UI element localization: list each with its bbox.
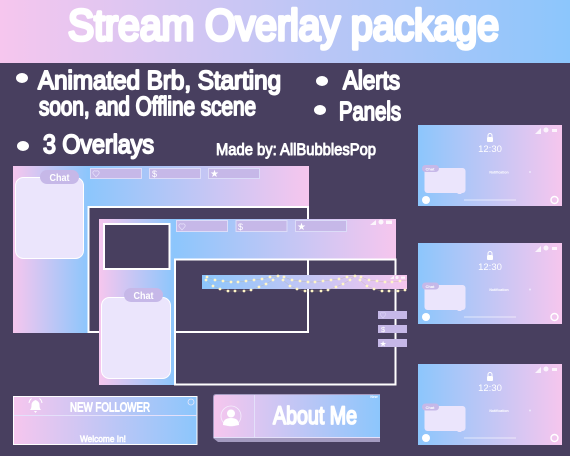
header banner — [0, 0, 570, 63]
overlay 1 — [13, 166, 309, 333]
frame — [88, 207, 308, 332]
bullet: animated scenes — [16, 73, 28, 83]
text: overlays: 3 Overlays — [43, 129, 154, 159]
stat box: star — [208, 168, 260, 180]
stat box: dollar: $ — [238, 222, 243, 232]
lock — [487, 252, 493, 260]
lock — [487, 134, 493, 142]
chat label: Chat — [426, 405, 435, 410]
icon: close — [188, 399, 194, 405]
small stat boxes — [378, 311, 407, 348]
panel phone 3 — [418, 364, 562, 445]
webcam frame — [104, 224, 170, 269]
chat label — [40, 170, 79, 184]
chat box — [16, 178, 84, 258]
home bar and buttons — [422, 196, 558, 204]
notification — [489, 409, 531, 413]
time: 12:30 — [478, 262, 502, 273]
text: welcome: Welcome In! — [80, 434, 126, 444]
text: animated scenes line 1: Animated Brb, Starting — [38, 65, 281, 95]
time: 12:30 — [478, 383, 502, 394]
chat box — [424, 406, 466, 432]
chat box — [102, 298, 170, 378]
stat box: heart — [90, 168, 142, 178]
text: alerts: Alerts — [343, 65, 400, 95]
credit: Made by: AllBubblesPop — [216, 140, 376, 159]
stat box: star — [296, 220, 346, 233]
panel: about me — [213, 394, 380, 442]
small stat boxes: ★ — [380, 340, 387, 348]
notification — [489, 288, 531, 292]
notification: Notification — [489, 170, 509, 174]
stat box: star: ★ — [297, 222, 306, 233]
frame — [175, 260, 396, 384]
chat label: Chat — [134, 290, 154, 302]
status icons — [535, 246, 557, 252]
chat label: Chat — [426, 166, 435, 172]
status icons — [370, 220, 392, 225]
stat box: dollar: $ — [152, 169, 157, 179]
feature list — [16, 65, 401, 159]
bullet: panels — [314, 105, 326, 115]
alert: new follower — [14, 396, 197, 444]
home bar and buttons — [422, 313, 558, 321]
time: 12:30 — [478, 144, 502, 155]
stat box: star: ★ — [210, 169, 219, 180]
panel phone 2 — [418, 243, 562, 324]
text: animated scenes line 2: soon, and Offline scene — [39, 91, 256, 121]
title: Stream Overlay package — [68, 1, 499, 50]
panel phone 1 — [418, 125, 562, 206]
heading: new follower: NEW FOLLOWER — [70, 400, 150, 414]
chat label — [422, 165, 439, 172]
icon: user — [221, 406, 241, 426]
notification: Notification — [489, 288, 509, 292]
chat label — [422, 404, 439, 410]
chat label: Chat — [426, 284, 435, 289]
text: panels: Panels — [339, 96, 401, 126]
status icons — [390, 276, 405, 279]
small stat boxes: $ — [381, 325, 386, 334]
home bar and buttons — [422, 434, 558, 442]
icon: bell — [29, 398, 42, 413]
chat label — [124, 288, 163, 302]
about me heading: About Me — [273, 402, 357, 430]
lock — [487, 372, 493, 381]
stat box: dollar — [236, 220, 287, 232]
status icons — [535, 128, 557, 134]
notification — [489, 170, 531, 174]
stat box: heart — [176, 220, 228, 232]
stat box: dollar — [150, 168, 200, 179]
inner line from overlay 1 — [175, 259, 309, 332]
bullet: alerts — [316, 76, 328, 86]
bullet: overlays — [17, 141, 29, 151]
notification: Notification — [489, 409, 509, 413]
overlay 2 — [99, 219, 396, 385]
chat label: Chat — [50, 172, 70, 184]
chat box — [424, 285, 466, 311]
chat box — [424, 168, 466, 194]
brb strip with string lights — [202, 275, 407, 292]
tag: New — [370, 395, 378, 399]
chat label — [422, 282, 439, 290]
status icons — [535, 366, 557, 373]
